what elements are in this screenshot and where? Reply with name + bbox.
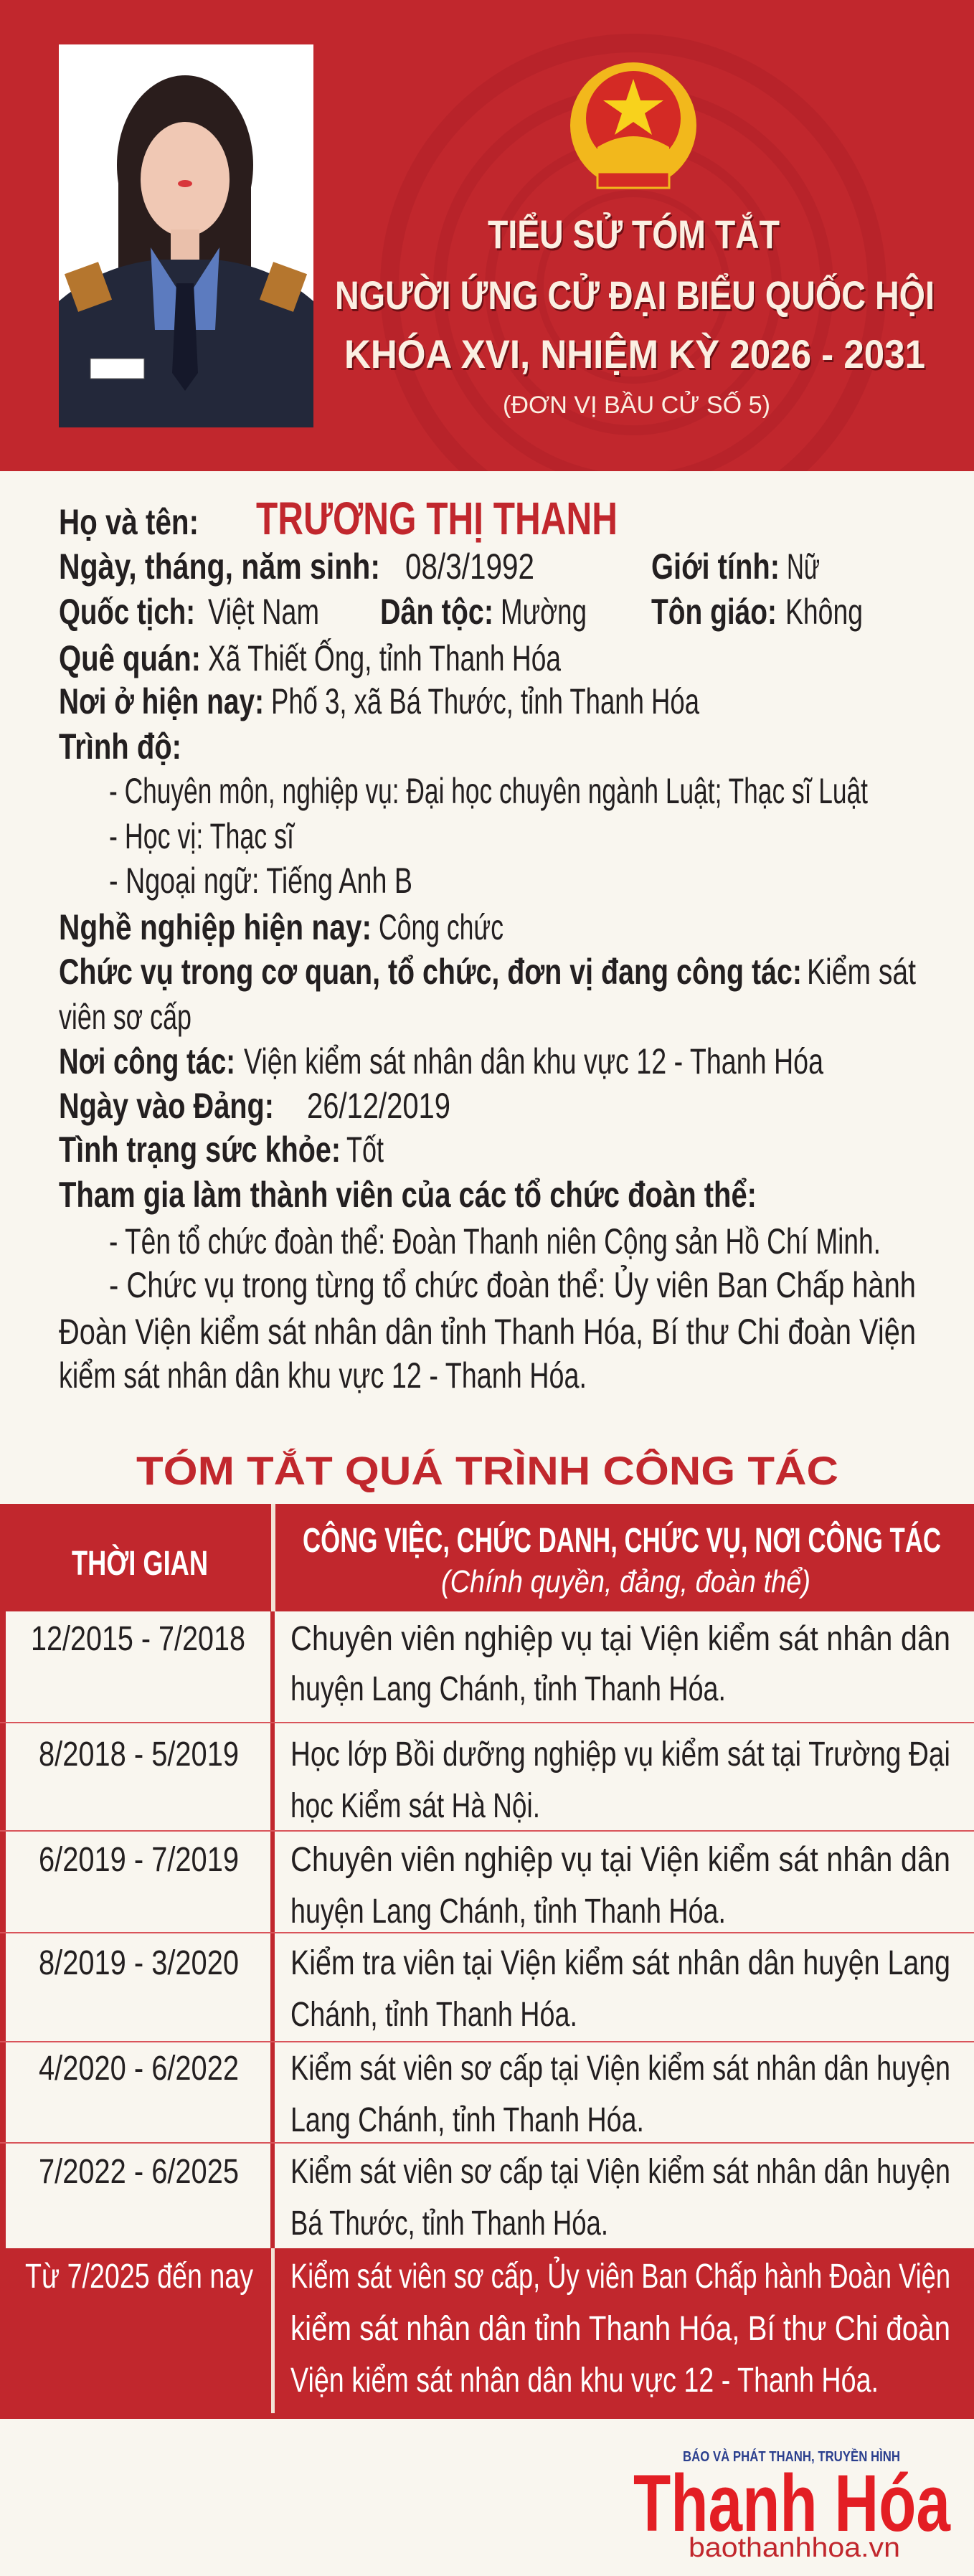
bio text block: Dân tộc: (380, 592, 493, 632)
table current row (highlighted) (0, 2248, 974, 2419)
section heading: work history: TÓM TẮT QUÁ TRÌNH CÔNG TÁC (136, 1448, 838, 1493)
bio text block: - Ngoại ngữ: Tiếng Anh B (109, 861, 412, 901)
bio text block: Tham gia làm thành viên của các tổ chức đoàn thể: (59, 1175, 757, 1215)
table header row: (Chính quyền, đảng, đoàn thể) (441, 1564, 810, 1599)
bio text block: Nơi công tác: (59, 1041, 235, 1081)
table current row (highlighted): Từ 7/2025 đến nay (25, 2258, 253, 2296)
bio text block: Nghề nghiệp hiện nay: (59, 907, 372, 947)
table body rows: 6/2019 - 7/2019 (39, 1841, 239, 1879)
title: KHÓA XVI, NHIỆM KỲ 2026 - 2031 (346, 333, 927, 379)
title: TIỂU SỬ TÓM TẮT (489, 214, 781, 259)
bio text block: Nữ (787, 546, 820, 587)
header banner (0, 0, 974, 471)
bio text block: Công chức (379, 907, 503, 947)
bio text block: Tốt (346, 1130, 384, 1170)
bio text block: Tôn giáo: (651, 592, 777, 632)
icon: national emblem (570, 62, 696, 189)
bio text block: Kiểm sát (807, 952, 916, 992)
table: work history (0, 1504, 974, 2419)
table body rows: 8/2019 - 3/2020 (39, 1944, 239, 1982)
table header row (0, 1504, 974, 1611)
table body rows: học Kiểm sát Hà Nội. (290, 1787, 540, 1825)
title (335, 212, 936, 379)
bio text block: kiểm sát nhân dân khu vực 12 - Thanh Hóa. (59, 1355, 587, 1396)
bio text block: Quốc tịch: (59, 592, 195, 632)
table body rows: 8/2018 - 5/2019 (39, 1736, 239, 1774)
bio text block: Tình trạng sức khỏe: (59, 1130, 341, 1170)
table body rows: Chánh, tỉnh Thanh Hóa. (290, 1996, 577, 2034)
bio text block: Ngày, tháng, năm sinh: (59, 546, 380, 587)
bio text block: Họ và tên: (59, 502, 199, 542)
title: KHÓA XVI, NHIỆM KỲ 2026 - 2031 (344, 331, 925, 377)
bio text block: Xã Thiết Ống, tỉnh Thanh Hóa (208, 638, 561, 678)
logo: Thanh Hoa newspaper: BÁO VÀ PHÁT THANH, TRUYỀN HÌNH (683, 2448, 900, 2465)
bio text block: - Học vị: Thạc sĩ (109, 816, 295, 856)
table body rows (0, 1611, 974, 2248)
bio text block: Việt Nam (208, 592, 319, 632)
table body rows: 4/2020 - 6/2022 (39, 2050, 239, 2088)
bio text block: Quê quán: (59, 638, 201, 678)
bio text block: Mường (501, 592, 587, 632)
table body rows: Lang Chánh, tỉnh Thanh Hóa. (290, 2101, 644, 2139)
logo: Thanh Hoa newspaper: baothanhhoa.vn (689, 2533, 900, 2563)
table body rows: Bá Thước, tỉnh Thanh Hóa. (290, 2205, 608, 2243)
bio text block: Ngày vào Đảng: (59, 1086, 274, 1126)
bio text block: Không (785, 592, 863, 632)
subtitle: (ĐƠN VỊ BẦU CỬ SỐ 5) (503, 391, 770, 419)
bio text block: 08/3/1992 (405, 546, 534, 587)
bio text block: 26/12/2019 (307, 1086, 450, 1126)
table header row: THỜI GIAN (72, 1543, 208, 1583)
photo of candidate (59, 44, 313, 427)
bio text block: viên sơ cấp (59, 997, 192, 1037)
table body rows: 12/2015 - 7/2018 (31, 1620, 245, 1658)
bio text block: Nơi ở hiện nay: (59, 681, 264, 721)
table body rows: huyện Lang Chánh, tỉnh Thanh Hóa. (290, 1893, 726, 1931)
bio text block: Giới tính: (651, 546, 780, 587)
title: TIỂU SỬ TÓM TẮT (488, 212, 780, 257)
table body rows: huyện Lang Chánh, tỉnh Thanh Hóa. (290, 1670, 726, 1708)
bio text block: Phố 3, xã Bá Thước, tỉnh Thanh Hóa (271, 681, 699, 721)
bio text block: TRƯƠNG THỊ THANH (256, 493, 618, 544)
table body rows: 7/2022 - 6/2025 (39, 2153, 239, 2191)
bio text block (59, 493, 916, 1396)
bio text block: Trình độ: (59, 726, 181, 767)
